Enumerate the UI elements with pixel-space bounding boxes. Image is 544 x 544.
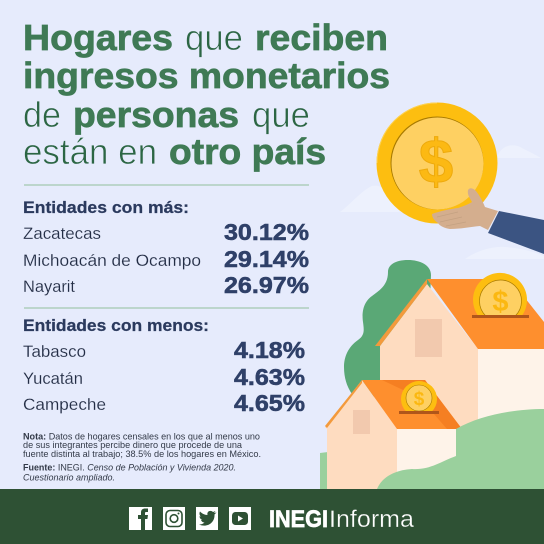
row: Tabasco [23,337,305,363]
icon: instagram [163,507,185,530]
title [23,17,390,172]
footer bar [0,489,544,544]
title: ingresos monetarios [23,55,390,96]
icon: hand [432,188,498,230]
left ground [320,452,328,489]
icon: facebook [129,507,152,530]
note and source: Fuente: INEGI. Censo de Población y Vivienda 2020. [23,462,236,472]
title: Hogares [23,17,173,58]
note and source: fuente distinta al trabajo; 38.5% de los hogares en México. [23,449,261,459]
row: Nayarit: 26.97% [224,272,309,298]
row: Campeche: 4.65% [234,390,305,416]
row: Zacatecas: Zacatecas [23,224,101,243]
row: Campeche: Campeche [23,395,106,414]
title: reciben [255,17,388,58]
logo: INEGI Informa [269,506,415,533]
title: otro país [169,131,326,172]
clouds [340,145,544,259]
heading: entidades con menos: Entidades con menos: [23,316,209,335]
row: Michoacán de Ocampo: 29.14% [224,246,309,272]
title: personas [73,94,239,135]
title: que [185,17,243,58]
panel: entidades con menos [23,316,305,416]
logo: INEGI Informa: INEGI [269,506,328,533]
row: Yucatán: Yucatán [23,369,83,388]
row: Yucatán [23,364,305,390]
large house [375,273,544,489]
title: que [252,94,310,135]
title: están en [23,131,157,172]
note and source [23,432,261,482]
row: Yucatán: 4.63% [234,364,305,390]
small house [325,380,462,489]
icon: youtube [229,507,251,530]
icon: large coin [376,102,498,224]
tiny coin on roof: $ [414,389,425,410]
row: Zacatecas: 30.12% [224,219,309,245]
note and source: Nota: Datos de hogares censales en los que al menos uno [23,432,260,442]
row: Nayarit [23,272,309,298]
icon: arm sleeve [488,211,544,254]
hill [377,409,544,489]
illustration: coin and hand [376,102,544,254]
row: Nayarit: Nayarit [23,277,75,296]
tree [344,260,431,400]
illustration: houses [320,260,544,489]
note and source: Cuestionario ampliado. [23,472,115,482]
logo: INEGI Informa: Informa [329,506,415,533]
row: Tabasco: Tabasco [23,342,86,361]
row: Campeche [23,390,305,416]
small coin on roof: $ [492,286,509,318]
heading: entidades con más: Entidades con más: [23,198,189,217]
row: Michoacán de Ocampo [23,246,309,272]
row: Michoacán de Ocampo: Michoacán de Ocampo [23,251,201,270]
note and source: de sus integrantes percibe dinero que procede de una [23,440,243,450]
icon: twitter [196,507,218,530]
title: de [23,94,61,135]
small coin on roof [472,273,529,318]
row: Tabasco: 4.18% [234,337,305,363]
row: Zacatecas [23,219,309,245]
icon: large coin: $ [419,128,453,197]
panel: entidades con más [23,198,309,298]
